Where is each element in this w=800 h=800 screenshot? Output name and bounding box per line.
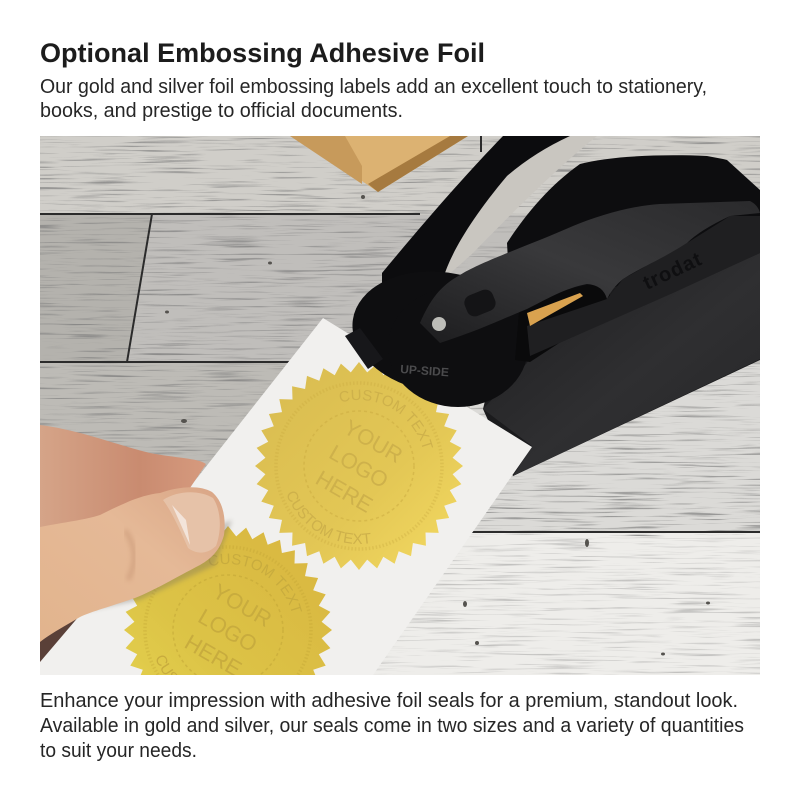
closing text (40, 690, 744, 762)
nail highlight (172, 505, 190, 545)
dark strip below thumb (40, 618, 77, 662)
foil seal: upper (255, 362, 463, 570)
foil seal: upper: YOUR (339, 415, 407, 468)
closing text: to suit your needs. (40, 740, 197, 762)
knurled knob (345, 328, 383, 369)
thumbnail (163, 492, 220, 553)
foil seal: upper: CUSTOM TEXT (288, 492, 370, 544)
closing text: Available in gold and silver, our seals come in two sizes and a variety of quantities (40, 715, 744, 737)
paper backing sheet (40, 318, 532, 675)
embosser base (483, 253, 760, 476)
gold plate in slot (527, 293, 583, 326)
intro text: books, and prestige to official documents. (40, 100, 403, 122)
foil seal: lower: LOGO (194, 604, 262, 657)
head rim (402, 361, 526, 407)
slot and mechanism (519, 293, 610, 362)
round embossing head (352, 272, 519, 384)
wood table background (40, 136, 760, 675)
index finger (40, 425, 206, 530)
silver reflection on handle (443, 136, 597, 279)
up-side marking: UP-SIDE (400, 362, 449, 379)
foil seal: lower: HERE (181, 629, 246, 682)
hand holding the sheet (40, 425, 232, 662)
intro text (40, 76, 707, 122)
closing text: Enhance your impression with adhesive foil seals for a premium, standout look. (40, 690, 738, 712)
lower strip of lever (527, 216, 760, 356)
foil seal: lower: YOUR (208, 579, 276, 632)
intro text: Our gold and silver foil embossing labels add an excellent touch to stationery, (40, 76, 707, 98)
foil seal: lower (124, 526, 332, 675)
rivet (432, 317, 446, 331)
thumb (40, 487, 225, 642)
foil seal: upper: CUSTOM TEXT (340, 390, 433, 448)
lever front (420, 201, 760, 343)
wooden block (290, 136, 468, 192)
lever latch (464, 290, 496, 316)
foil seal: upper: LOGO (325, 440, 393, 493)
rear housing (507, 155, 760, 295)
finger shadow (98, 520, 232, 610)
title: Optional Embossing Adhesive Foil (40, 38, 485, 68)
photo: embosser and foil seals (40, 136, 760, 675)
foil seal: lower: CUSTOM TEXT (208, 554, 302, 612)
embosser body (345, 136, 760, 407)
trodat brand: trodat (640, 248, 706, 295)
foil seal: upper: HERE (312, 465, 377, 518)
knuckle crease (125, 530, 134, 580)
upper handle (382, 136, 570, 282)
wood knots (165, 195, 710, 656)
foil seal: lower: CUSTOM TEXT (156, 656, 178, 675)
